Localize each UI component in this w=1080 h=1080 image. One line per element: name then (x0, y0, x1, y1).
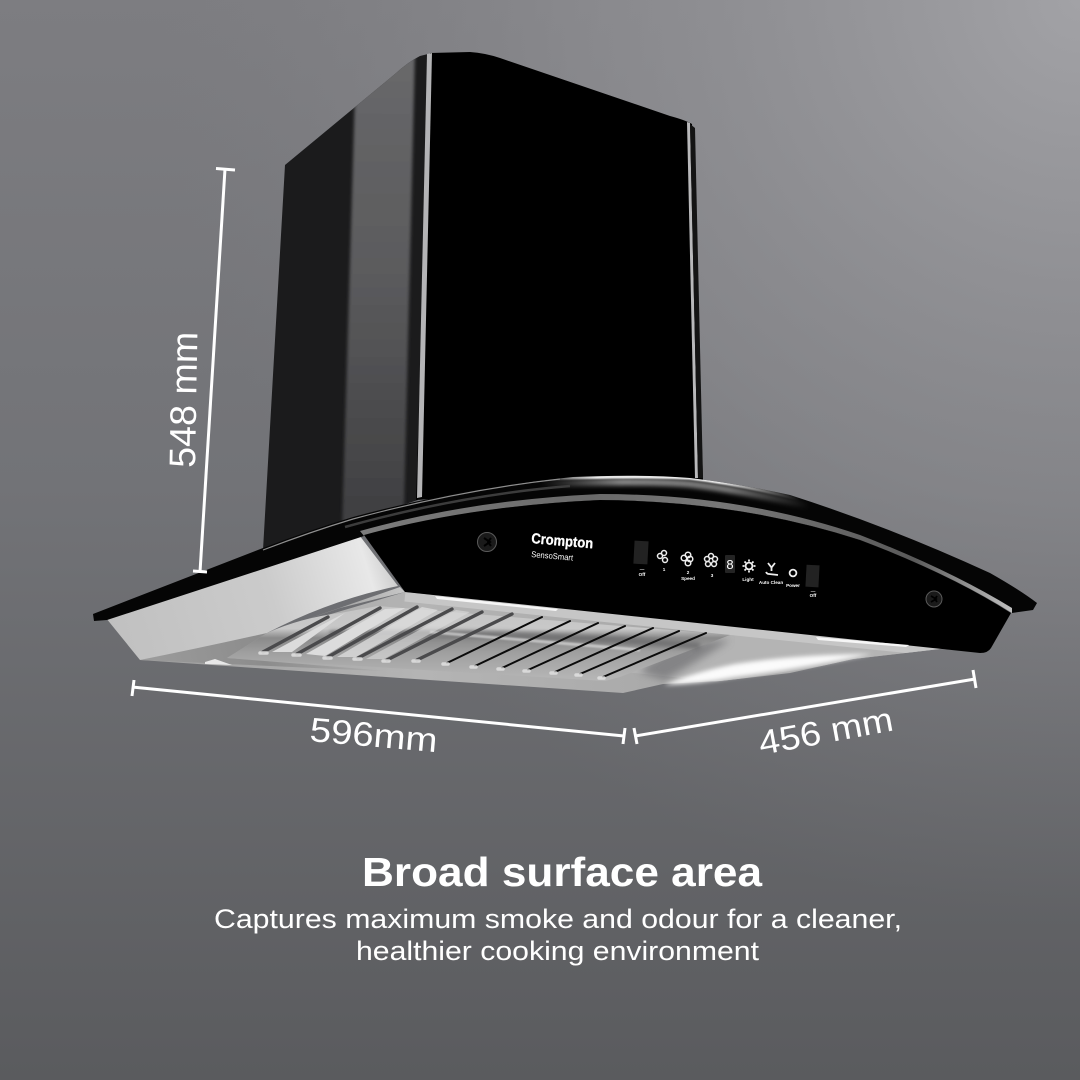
control labels: 1 (663, 567, 666, 572)
control labels: Speed (681, 576, 695, 581)
control labels: Power (786, 583, 800, 588)
speed 1 icon (658, 550, 668, 562)
left round sensor (478, 532, 496, 552)
chimney side panel (263, 50, 428, 550)
panel lights (435, 596, 909, 647)
speed 3 icon (704, 554, 718, 566)
control labels: — (640, 567, 645, 572)
grille slats (260, 607, 706, 678)
heading: Broad surface area (362, 849, 763, 895)
on/off display right (805, 565, 820, 587)
tray lower wedge (140, 587, 405, 672)
chimney left chrome strip (417, 53, 432, 498)
chimney right chrome strips (687, 122, 703, 478)
dimension: depth 456 mm: 456 mm (756, 701, 896, 763)
control labels: Auto Clean (759, 580, 783, 585)
light icon (742, 560, 756, 572)
on/off display left (633, 541, 649, 564)
brand logo: SensoSmart (531, 549, 574, 563)
description text (214, 904, 902, 966)
left steel side panel (106, 527, 398, 660)
dimension: height 548 mm (162, 168, 235, 572)
dimension: height 548 mm: 548 mm (162, 331, 205, 468)
chimney front panel (416, 52, 703, 500)
black control panel (364, 500, 1011, 653)
brand logo: Crompton (531, 531, 594, 552)
touch controls (633, 541, 820, 598)
control labels: 2 (687, 570, 690, 575)
description text: Captures maximum smoke and odour for a cleaner, (214, 904, 902, 934)
control labels: Light (742, 577, 754, 582)
tray end latch (205, 659, 232, 665)
power icon (790, 570, 796, 576)
rim highlight (360, 494, 1012, 613)
glass canopy rim (93, 476, 1037, 621)
control labels (639, 567, 817, 598)
speed 2 icon (681, 552, 693, 566)
control labels: Off (639, 572, 646, 577)
dimension: width 596mm (132, 680, 625, 760)
side panel light reflection (342, 50, 415, 530)
control labels: Off (810, 593, 817, 598)
light slat covers (272, 607, 470, 659)
underside steel tray (140, 592, 983, 693)
control labels: 3 (711, 573, 714, 578)
right round sensor (926, 591, 942, 607)
tray bright streak (664, 654, 872, 685)
rim reflections (263, 477, 810, 550)
brand logo (531, 531, 594, 563)
description text: healthier cooking environment (356, 936, 760, 966)
tray right reflections (405, 596, 945, 682)
digit display: 8 (726, 557, 734, 572)
control labels: — (811, 589, 816, 594)
range hood product (93, 50, 1037, 693)
auto clean icon (766, 563, 778, 575)
dimension: width 596mm: 596mm (308, 711, 439, 760)
filter grille (227, 606, 730, 681)
digit display (725, 555, 735, 573)
dimension: depth 456 mm (634, 670, 976, 763)
